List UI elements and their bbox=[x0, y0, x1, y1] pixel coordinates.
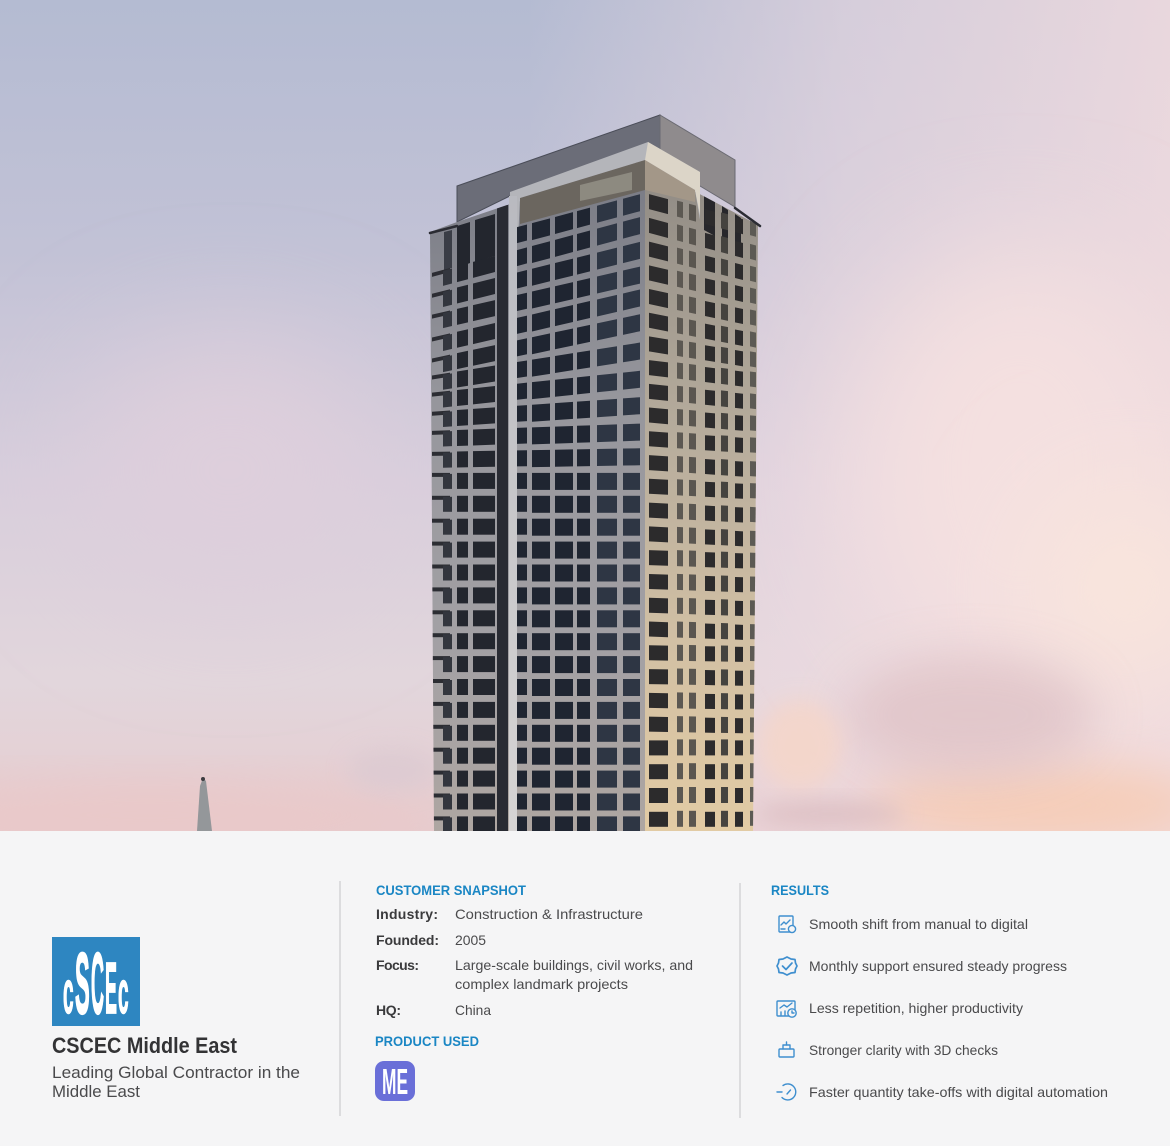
divider bbox=[340, 881, 341, 1116]
CSCEC logo: c bbox=[63, 960, 74, 1026]
row: focus: Large-scale buildings, civil works, and bbox=[455, 957, 693, 973]
info panel background bbox=[0, 831, 1170, 1146]
row: founded bbox=[376, 932, 486, 948]
company tagline: Middle East bbox=[52, 1082, 140, 1101]
divider bbox=[740, 883, 741, 1118]
CSCEC logo bbox=[52, 936, 140, 1032]
row: headquarters: China bbox=[455, 1002, 491, 1018]
panel: company identity bbox=[52, 936, 300, 1101]
roof fascia bbox=[510, 142, 700, 240]
panel: results bbox=[771, 882, 1108, 1100]
row: headquarters bbox=[376, 1002, 491, 1018]
roof parapet bbox=[457, 115, 735, 222]
results heading: RESULTS bbox=[771, 882, 829, 898]
vertical white fin bbox=[509, 196, 517, 831]
icon: product logo: ME bbox=[382, 1061, 408, 1102]
company name: CSCEC Middle East bbox=[52, 1033, 238, 1058]
result: 3D checks: Stronger clarity with 3D checks bbox=[809, 1042, 998, 1058]
row: headquarters: HQ: bbox=[376, 1002, 401, 1018]
company tagline bbox=[52, 1063, 300, 1101]
row: focus bbox=[376, 957, 693, 992]
result: monthly support: Monthly support ensured steady progress bbox=[809, 958, 1067, 974]
CSCEC logo: C bbox=[91, 937, 104, 1032]
sky background bbox=[0, 0, 1170, 845]
CSCEC logo: E bbox=[105, 950, 117, 1029]
result: quantity take-offs: Faster quantity take-offs with digital automation bbox=[809, 1084, 1108, 1100]
company tagline: Leading Global Contractor in the bbox=[52, 1063, 300, 1082]
top slab edges bbox=[430, 208, 760, 233]
result: manual to digital: Smooth shift from manual to digital bbox=[809, 916, 1028, 932]
product heading: PRODUCT USED bbox=[375, 1033, 479, 1049]
result: productivity: Less repetition, higher productivity bbox=[809, 1000, 1023, 1016]
snapshot heading: CUSTOMER SNAPSHOT bbox=[376, 882, 526, 898]
distant spire bbox=[197, 777, 212, 831]
row: industry bbox=[376, 906, 643, 922]
row: founded: 2005 bbox=[455, 932, 486, 948]
row: industry: Industry: bbox=[376, 906, 438, 922]
row: focus: complex landmark projects bbox=[455, 976, 628, 992]
face: left and centre bbox=[430, 165, 645, 831]
tower bbox=[430, 115, 760, 833]
panel: customer snapshot bbox=[375, 882, 693, 1102]
CSCEC logo: c bbox=[118, 960, 129, 1026]
row: founded: Founded: bbox=[376, 932, 439, 948]
row: industry: Construction & Infrastructure bbox=[455, 906, 643, 922]
icon: product logo bbox=[375, 1061, 415, 1102]
row: focus: Focus: bbox=[376, 957, 419, 973]
CSCEC logo: S bbox=[75, 936, 90, 1032]
window grid bbox=[432, 193, 756, 833]
face: right bbox=[645, 165, 758, 831]
